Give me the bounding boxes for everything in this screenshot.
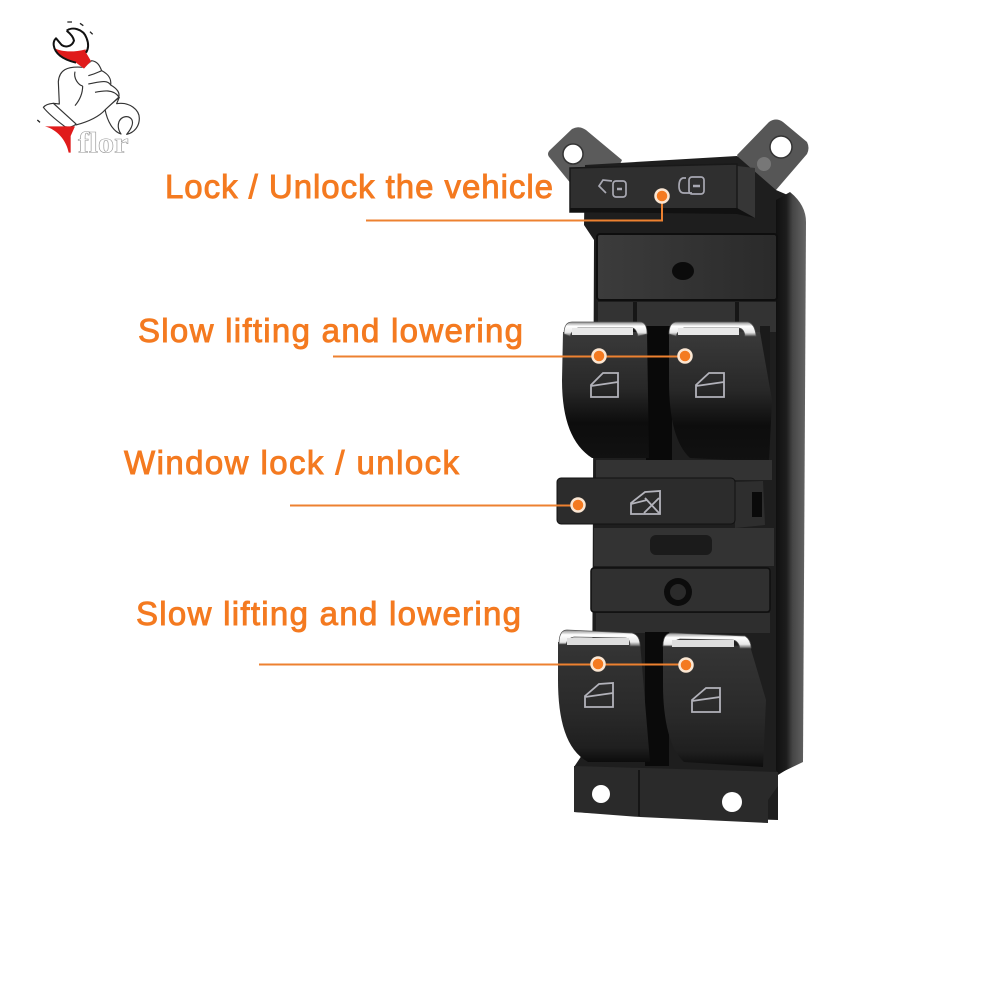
leader line xyxy=(366,196,662,220)
label: Slow lifting and lowering xyxy=(138,312,523,349)
marker dots xyxy=(592,350,692,362)
mounting ear right xyxy=(737,120,808,190)
switch panel product xyxy=(548,120,808,823)
logo lower wrench xyxy=(105,97,139,134)
label: Window lock / unlock xyxy=(124,444,460,481)
icon: door ajar lock xyxy=(599,180,626,197)
callout: slow lifting upper xyxy=(138,312,692,362)
label: Slow lifting and lowering xyxy=(136,595,521,632)
mounting ear left xyxy=(548,127,622,205)
icon: door closed lock xyxy=(679,177,704,194)
leader line xyxy=(259,664,686,666)
icon: window crossed xyxy=(631,491,660,514)
logo red swoosh xyxy=(45,126,75,153)
upper right rocker xyxy=(669,322,772,462)
leader line xyxy=(290,504,578,506)
icon: window xyxy=(692,688,720,712)
logo wrench upper head xyxy=(37,22,93,122)
marker dots xyxy=(592,658,692,672)
lower right rocker xyxy=(663,633,766,767)
lock button xyxy=(570,164,755,218)
label: Lock / Unlock the vehicle xyxy=(165,168,553,205)
callout: lock / unlock the vehicle xyxy=(165,168,668,220)
base with mounting holes xyxy=(574,766,778,823)
marker dot xyxy=(656,190,668,202)
logo: hand holding wrench xyxy=(37,22,139,159)
icon: window xyxy=(591,373,618,397)
logo hand xyxy=(43,61,119,127)
switch housing xyxy=(574,156,790,820)
logo cuff xyxy=(43,103,76,127)
icon: window xyxy=(585,683,613,707)
upper left rocker xyxy=(562,322,649,458)
icon: window xyxy=(696,373,724,397)
window lock button xyxy=(557,460,772,528)
leader line xyxy=(333,356,685,358)
lower mid panel with screw hole xyxy=(591,528,774,633)
lower pair of window switches xyxy=(558,630,778,823)
callout: window lock xyxy=(124,444,584,512)
lower left rocker xyxy=(558,630,650,762)
upper recessed panel with pin xyxy=(597,234,777,332)
callout: slow lifting lower xyxy=(136,595,692,672)
logo wordmark: flor xyxy=(78,127,129,159)
marker dot xyxy=(572,498,584,512)
upper pair of window switches xyxy=(562,322,772,462)
housing right rail xyxy=(776,192,806,774)
